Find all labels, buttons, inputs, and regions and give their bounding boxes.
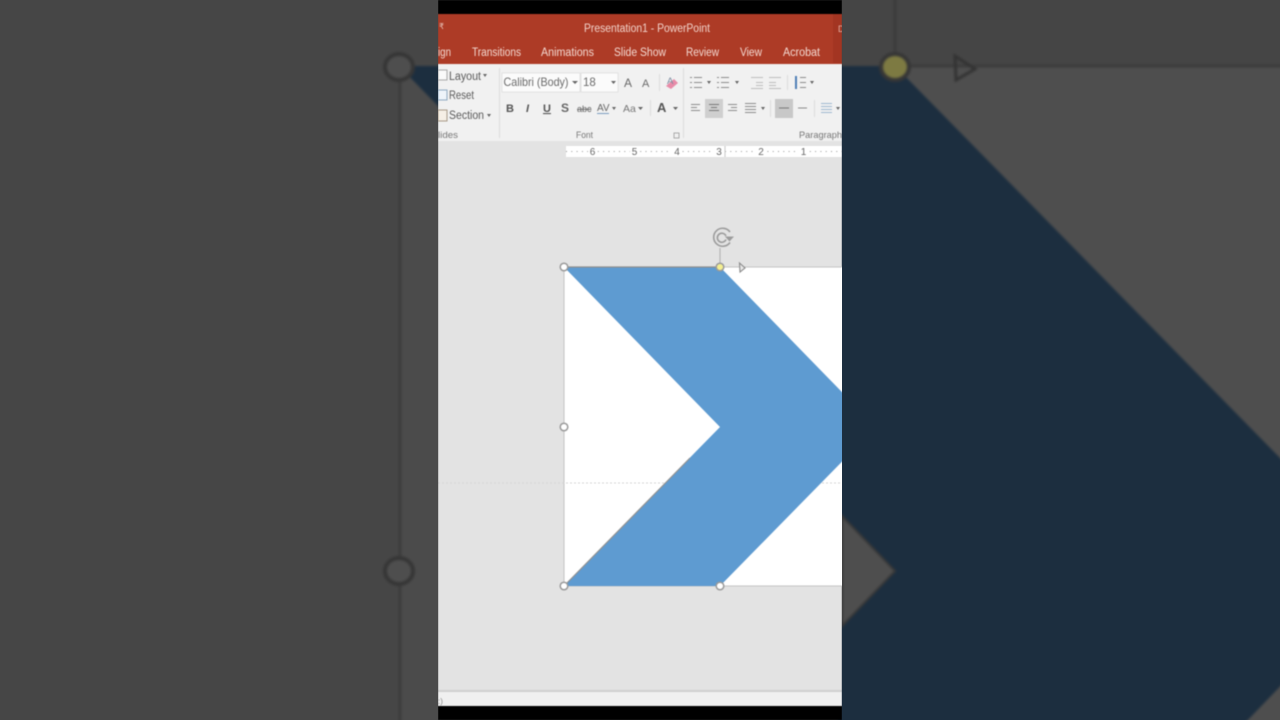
ruler: 5 [632, 147, 638, 158]
slides group: Layout [449, 71, 482, 83]
ribbon tabs: Transitions [472, 47, 521, 59]
black bar bottom [438, 706, 842, 720]
canvas area [438, 140, 842, 691]
ribbon panel [438, 64, 842, 141]
font group: 18 [583, 77, 596, 89]
font group: AV [597, 103, 610, 114]
ribbon tabs: ign [438, 47, 451, 59]
font group [502, 73, 679, 141]
ribbon tabs: Slide Show [614, 47, 667, 59]
ribbon tabs: Review [686, 47, 720, 59]
slides group: Section [449, 110, 484, 122]
ruler [566, 146, 842, 158]
ribbon tabs: Animations [541, 47, 594, 59]
panel: blurred left backdrop [0, 0, 440, 720]
panel: PowerPoint window [438, 0, 876, 720]
slides group [438, 70, 491, 141]
font group: S [561, 101, 569, 115]
chevron shape [566, 266, 842, 587]
selection handles [560, 248, 724, 590]
title bar: ₹ [439, 22, 444, 31]
font group: A [642, 78, 650, 90]
ribbon tabs: View [740, 47, 763, 59]
icon: rotate handle [714, 228, 734, 246]
font group: abc [577, 104, 592, 114]
font group: Aa [623, 103, 636, 115]
black bar top [438, 0, 842, 14]
status bar: :) [438, 697, 443, 706]
icon: cursor [740, 263, 745, 272]
title bar [438, 14, 845, 64]
ruler: 2 [758, 147, 764, 158]
ribbon tabs [438, 47, 821, 59]
slide [562, 266, 842, 587]
ribbon tabs: Acrobat [783, 47, 821, 59]
font group: Font [576, 130, 593, 141]
font group: A [624, 76, 632, 90]
panel: blurred right backdrop [838, 0, 1280, 720]
slides group: lides [438, 130, 458, 141]
font group: A [667, 76, 674, 87]
video frame [383, 0, 1280, 720]
font group: A [657, 100, 667, 115]
slides group: Reset [449, 90, 475, 102]
paragraph group [690, 75, 840, 118]
ruler: 3 [716, 147, 722, 158]
title bar: Presentation1 - PowerPoint [584, 23, 711, 35]
ruler: 1 [801, 147, 807, 158]
title bar: D [838, 24, 845, 34]
font group: Calibri (Body) [504, 75, 569, 89]
font group: B [506, 103, 514, 115]
ruler: 4 [674, 147, 680, 158]
paragraph label: Paragraph [799, 130, 842, 141]
font group: U [543, 103, 551, 115]
font group: I [526, 103, 530, 115]
status bar [438, 690, 842, 706]
ruler: 6 [590, 147, 596, 158]
